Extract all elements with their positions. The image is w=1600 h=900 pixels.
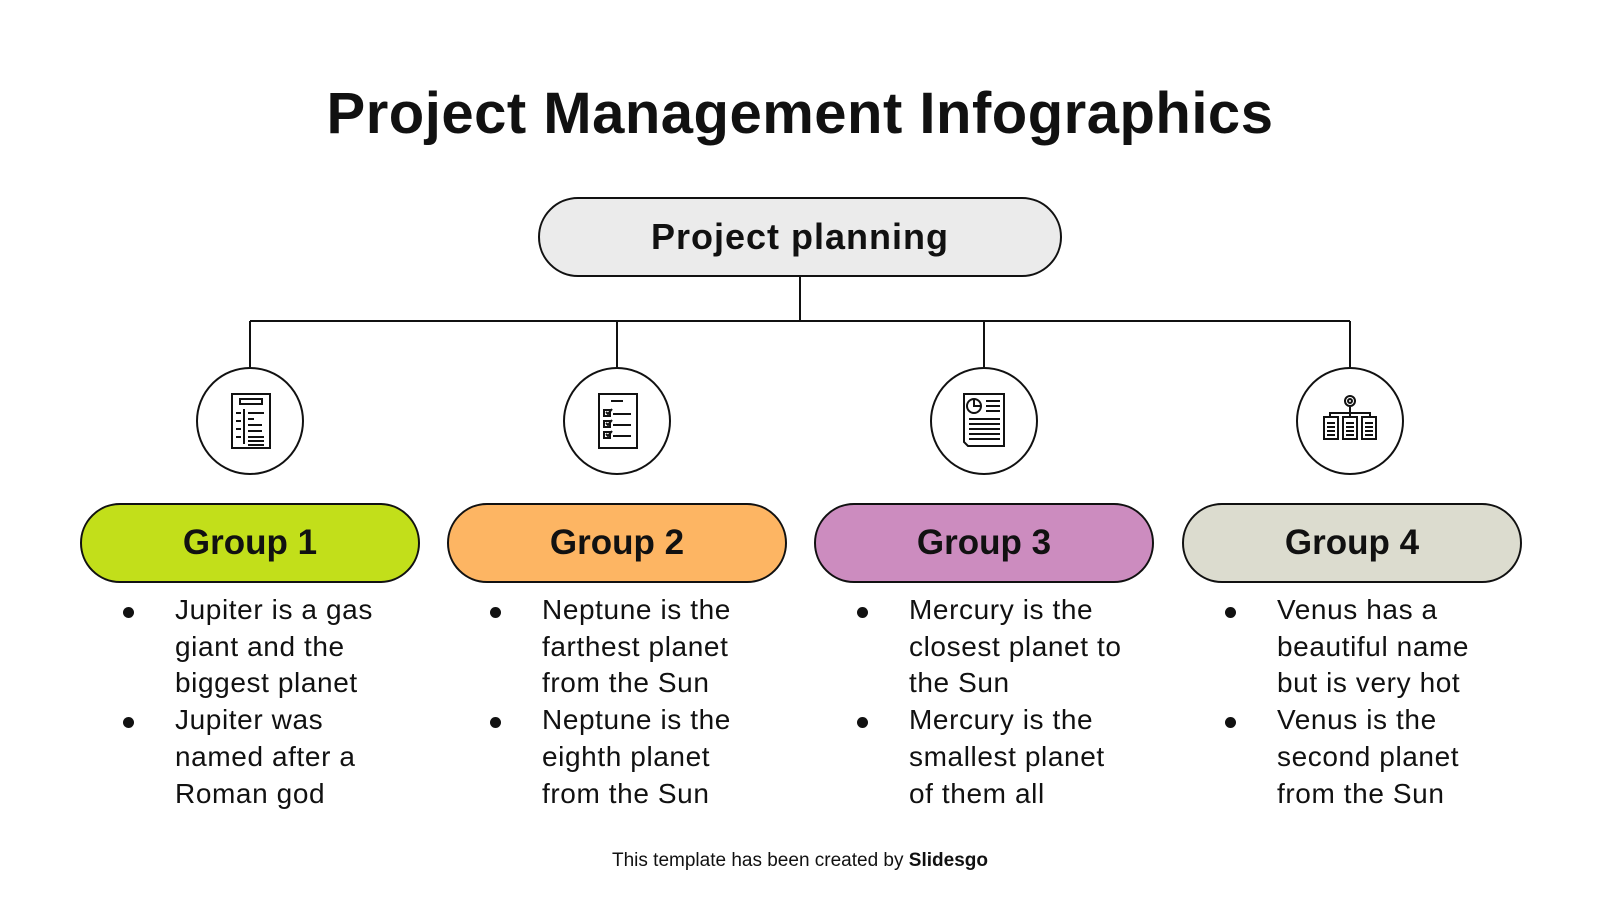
group 4 text: but is very hot xyxy=(1277,667,1460,698)
group 2 text: from the Sun xyxy=(542,778,710,809)
group 1 text: named after a xyxy=(175,741,356,772)
group 3 text: of them all xyxy=(909,778,1045,809)
group 4 text: Venus is the xyxy=(1277,704,1437,735)
group 1 text xyxy=(123,594,373,809)
group 4 text: Venus has a xyxy=(1277,594,1438,625)
group 4 text xyxy=(1225,594,1469,809)
group 2 text: from the Sun xyxy=(542,667,710,698)
group 1 text: biggest planet xyxy=(175,667,358,698)
group 4 header: Group 4 xyxy=(1285,523,1419,562)
icon: report with pie chart xyxy=(930,367,1038,475)
group 4 text: from the Sun xyxy=(1277,778,1445,809)
group 3 header: Group 3 xyxy=(917,523,1051,562)
title: Project Management Infographics xyxy=(327,81,1273,146)
group 3 header xyxy=(814,503,1154,583)
group 2 text xyxy=(490,594,731,809)
group 3 text: smallest planet xyxy=(909,741,1105,772)
group 1 text: Jupiter was xyxy=(175,704,323,735)
group 3 text: closest planet to xyxy=(909,631,1122,662)
group 2 text: eighth planet xyxy=(542,741,710,772)
group 3 text xyxy=(857,594,1122,809)
group 3 text: Mercury is the xyxy=(909,704,1093,735)
icon: org chart with gear xyxy=(1296,367,1404,475)
group 2 text: Neptune is the xyxy=(542,704,731,735)
group 2 text: farthest planet xyxy=(542,631,728,662)
group 2 text: Neptune is the xyxy=(542,594,731,625)
root node: project planning xyxy=(538,197,1062,277)
icon: checklist xyxy=(563,367,671,475)
group 1 header xyxy=(80,503,420,583)
group 3 text: the Sun xyxy=(909,667,1010,698)
group 4 text: beautiful name xyxy=(1277,631,1469,662)
footer: This template has been created by Slidesgo xyxy=(612,850,988,871)
group 2 header: Group 2 xyxy=(550,523,684,562)
group 1 header: Group 1 xyxy=(183,523,317,562)
group 3 text: Mercury is the xyxy=(909,594,1093,625)
group 1 text: Jupiter is a gas xyxy=(175,594,373,625)
root node: project planning: Project planning xyxy=(651,216,949,257)
group 1 text: giant and the xyxy=(175,631,345,662)
group 4 header xyxy=(1182,503,1522,583)
group 1 text: Roman god xyxy=(175,778,325,809)
icon: document xyxy=(196,367,304,475)
group 2 header xyxy=(447,503,787,583)
group 4 text: second planet xyxy=(1277,741,1459,772)
